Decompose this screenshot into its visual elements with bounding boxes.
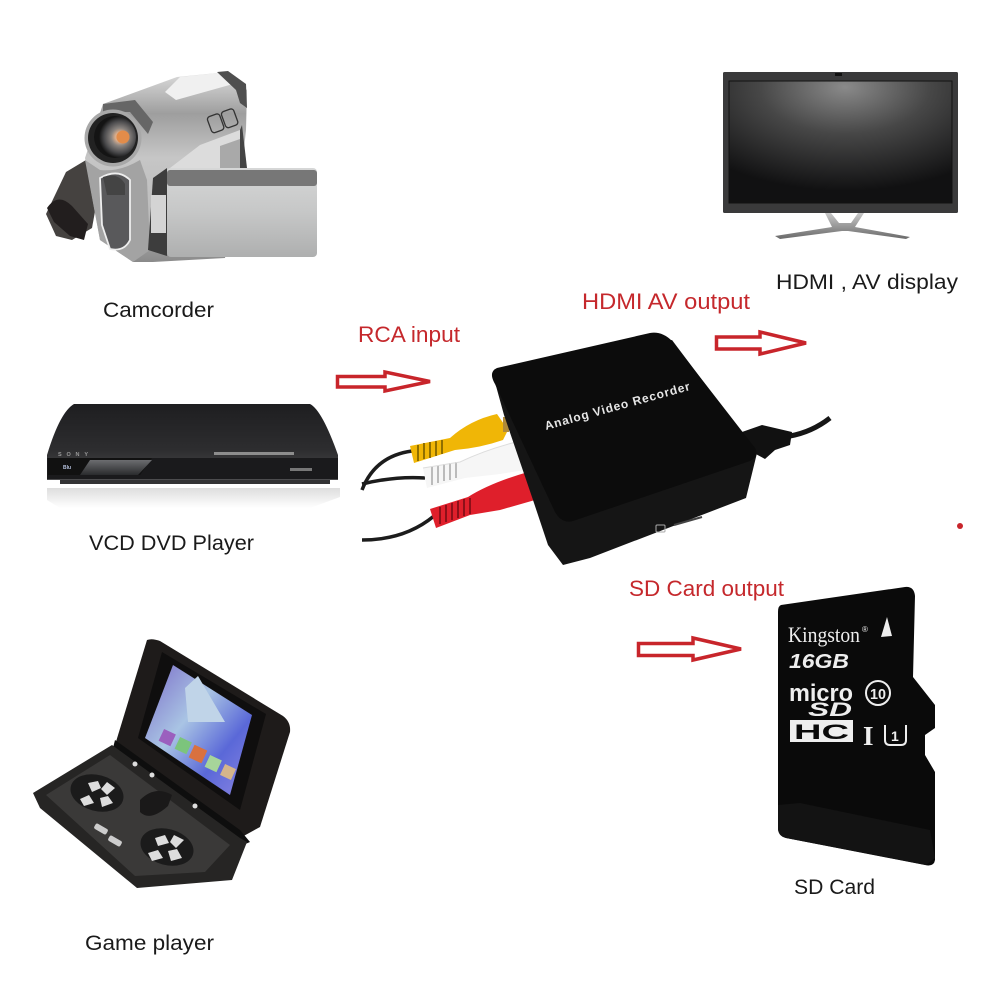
icon: microSD card: 10 bbox=[870, 686, 886, 703]
lid bbox=[115, 639, 290, 838]
label: VCD DVD Player: VCD DVD Player bbox=[89, 531, 254, 555]
arrow: HDMI output bbox=[716, 332, 806, 354]
icon: microSD card: 16GB bbox=[789, 651, 849, 673]
case top bbox=[492, 333, 757, 522]
icon: DVD player bbox=[47, 404, 340, 508]
arrow: RCA input bbox=[338, 372, 430, 391]
icon: microSD card: Kingston bbox=[788, 622, 860, 647]
icon: microSD card: 1 bbox=[891, 728, 899, 744]
label: SD Card output: SD Card output bbox=[629, 576, 784, 601]
speaker bbox=[140, 791, 172, 816]
white RCA plug bbox=[423, 442, 525, 488]
device: analog video recorder bbox=[362, 333, 830, 565]
label: RCA input: RCA input bbox=[358, 322, 460, 347]
SD slot bbox=[656, 517, 702, 532]
label: Game player: Game player bbox=[85, 931, 214, 955]
label: HDMI AV output: HDMI AV output bbox=[582, 289, 750, 314]
case side bbox=[493, 340, 757, 565]
base bbox=[33, 745, 247, 888]
icon: handheld game player bbox=[33, 639, 290, 888]
decorative red dot bbox=[957, 523, 963, 529]
label: SD Card: SD Card bbox=[794, 875, 875, 899]
icon: microSD card: SD bbox=[808, 700, 852, 721]
product name: Analog Video Recorder bbox=[543, 379, 692, 433]
icon: microSD card: I bbox=[863, 721, 874, 751]
icon: camcorder bbox=[46, 71, 317, 262]
icon: microSD card bbox=[778, 587, 935, 865]
icon: monitor bbox=[723, 72, 958, 239]
icon: microSD card: HC bbox=[794, 721, 849, 744]
left d-pad bbox=[66, 769, 128, 817]
right d-pad bbox=[136, 823, 198, 871]
red RCA plug bbox=[430, 472, 535, 528]
screen bbox=[145, 665, 252, 795]
icon: DVD player: Blu bbox=[63, 465, 71, 471]
icon: microSD card: micro bbox=[789, 680, 853, 707]
yellow RCA plug bbox=[410, 414, 509, 463]
label: HDMI , AV display: HDMI , AV display bbox=[776, 270, 958, 294]
icon: DVD player: SONY bbox=[58, 452, 88, 458]
label: Camcorder: Camcorder bbox=[103, 298, 214, 322]
cables bbox=[362, 451, 434, 540]
arrow: SD card output bbox=[638, 638, 741, 660]
icon: microSD card: ® bbox=[862, 625, 868, 634]
